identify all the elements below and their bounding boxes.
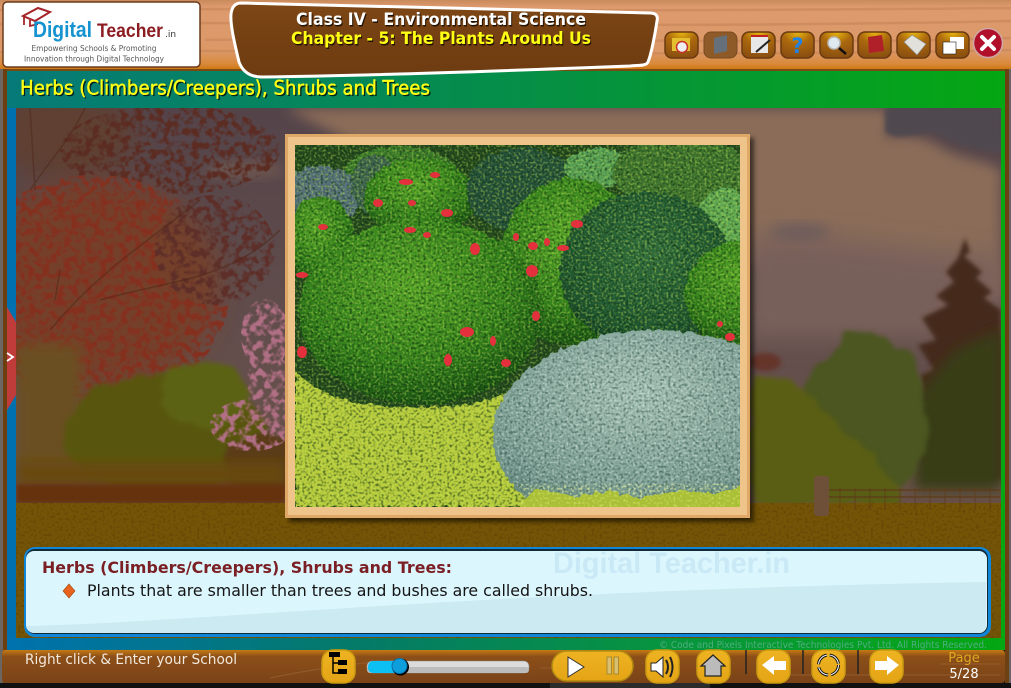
bottom wooden bar xyxy=(0,650,1011,688)
chapter label: Chapter - 5: The Plants Around Us xyxy=(291,29,591,48)
green bushes lower left xyxy=(16,345,305,504)
chapter label shadow: Chapter - 5: The Plants Around Us xyxy=(292,30,592,50)
bullet icon xyxy=(63,584,75,598)
green title bar xyxy=(7,69,1005,108)
left expand tab xyxy=(7,307,16,410)
icon: magnifier xyxy=(820,32,853,58)
logo tagline: Empowering Schools & Promoting xyxy=(32,44,156,53)
play pause control xyxy=(552,651,633,681)
heading text: Herbs (Climbers/Creepers), Shrubs and Trees xyxy=(20,76,430,100)
icon: help xyxy=(781,32,814,58)
previous button xyxy=(757,650,790,683)
class label: Class IV - Environmental Science xyxy=(296,10,586,29)
copyright: © Code and Pixels Interactive Technologies Pvt. Ltd. All Rights Reserved. xyxy=(659,640,987,651)
panel lower swoosh xyxy=(27,582,986,633)
page label: Page xyxy=(948,651,980,666)
background landscape photo xyxy=(0,93,1001,638)
icon: help: ? xyxy=(791,34,804,58)
contents button xyxy=(322,650,355,683)
red tree on the left xyxy=(16,108,280,404)
separators xyxy=(746,650,858,674)
wooden photo frame xyxy=(285,134,754,522)
red flowers xyxy=(296,172,735,367)
page number: 5/28 xyxy=(949,667,979,682)
fence and stone post xyxy=(814,476,1000,516)
logo wordmark: Digital xyxy=(33,17,92,42)
logo card: Innovation through Digital Technology xyxy=(24,54,164,64)
icon: open book xyxy=(897,32,930,58)
sound button xyxy=(646,650,679,683)
panel heading: Herbs (Climbers/Creepers), Shrubs and Trees: xyxy=(42,558,452,577)
logo card xyxy=(3,2,200,67)
shrubs photo xyxy=(295,145,740,507)
replay button xyxy=(812,650,845,683)
logo card: Teacher xyxy=(97,21,164,42)
meadow texture xyxy=(16,503,1001,638)
slide heading shadow: Herbs (Climbers/Creepers), Shrubs and Trees xyxy=(22,78,432,101)
chapter plank xyxy=(231,3,657,77)
graduation cap icon xyxy=(23,8,50,26)
silver shrub xyxy=(492,328,740,500)
icon: folder clock xyxy=(665,32,698,58)
front leaves strip xyxy=(520,484,740,507)
trees on the right xyxy=(749,238,1001,505)
icon: notes xyxy=(742,32,775,58)
pink blossom tree xyxy=(210,299,285,451)
icon: dictionary xyxy=(858,32,891,58)
icon: close xyxy=(974,28,1002,58)
icon: window resize xyxy=(936,32,969,58)
top wooden header xyxy=(0,0,1011,69)
info panel xyxy=(24,547,991,637)
far shrubs xyxy=(295,145,740,507)
logo card: .in xyxy=(165,30,176,40)
bullet text: Plants that are smaller than trees and bushes are called shrubs. xyxy=(87,581,593,600)
next button xyxy=(870,650,903,683)
icon: reference book xyxy=(704,32,737,58)
content frame edges xyxy=(7,108,1005,650)
meadow xyxy=(16,503,1001,638)
toolbar icons xyxy=(665,28,1002,58)
sky clouds xyxy=(205,108,1001,340)
chapter title shadow: Class IV - Environmental Science xyxy=(297,12,587,30)
home button xyxy=(697,650,730,683)
school label: Right click & Enter your School xyxy=(25,652,237,668)
leaf textures xyxy=(295,145,740,507)
progress slider xyxy=(367,658,529,676)
watermark: Digital Teacher.in xyxy=(553,547,790,580)
